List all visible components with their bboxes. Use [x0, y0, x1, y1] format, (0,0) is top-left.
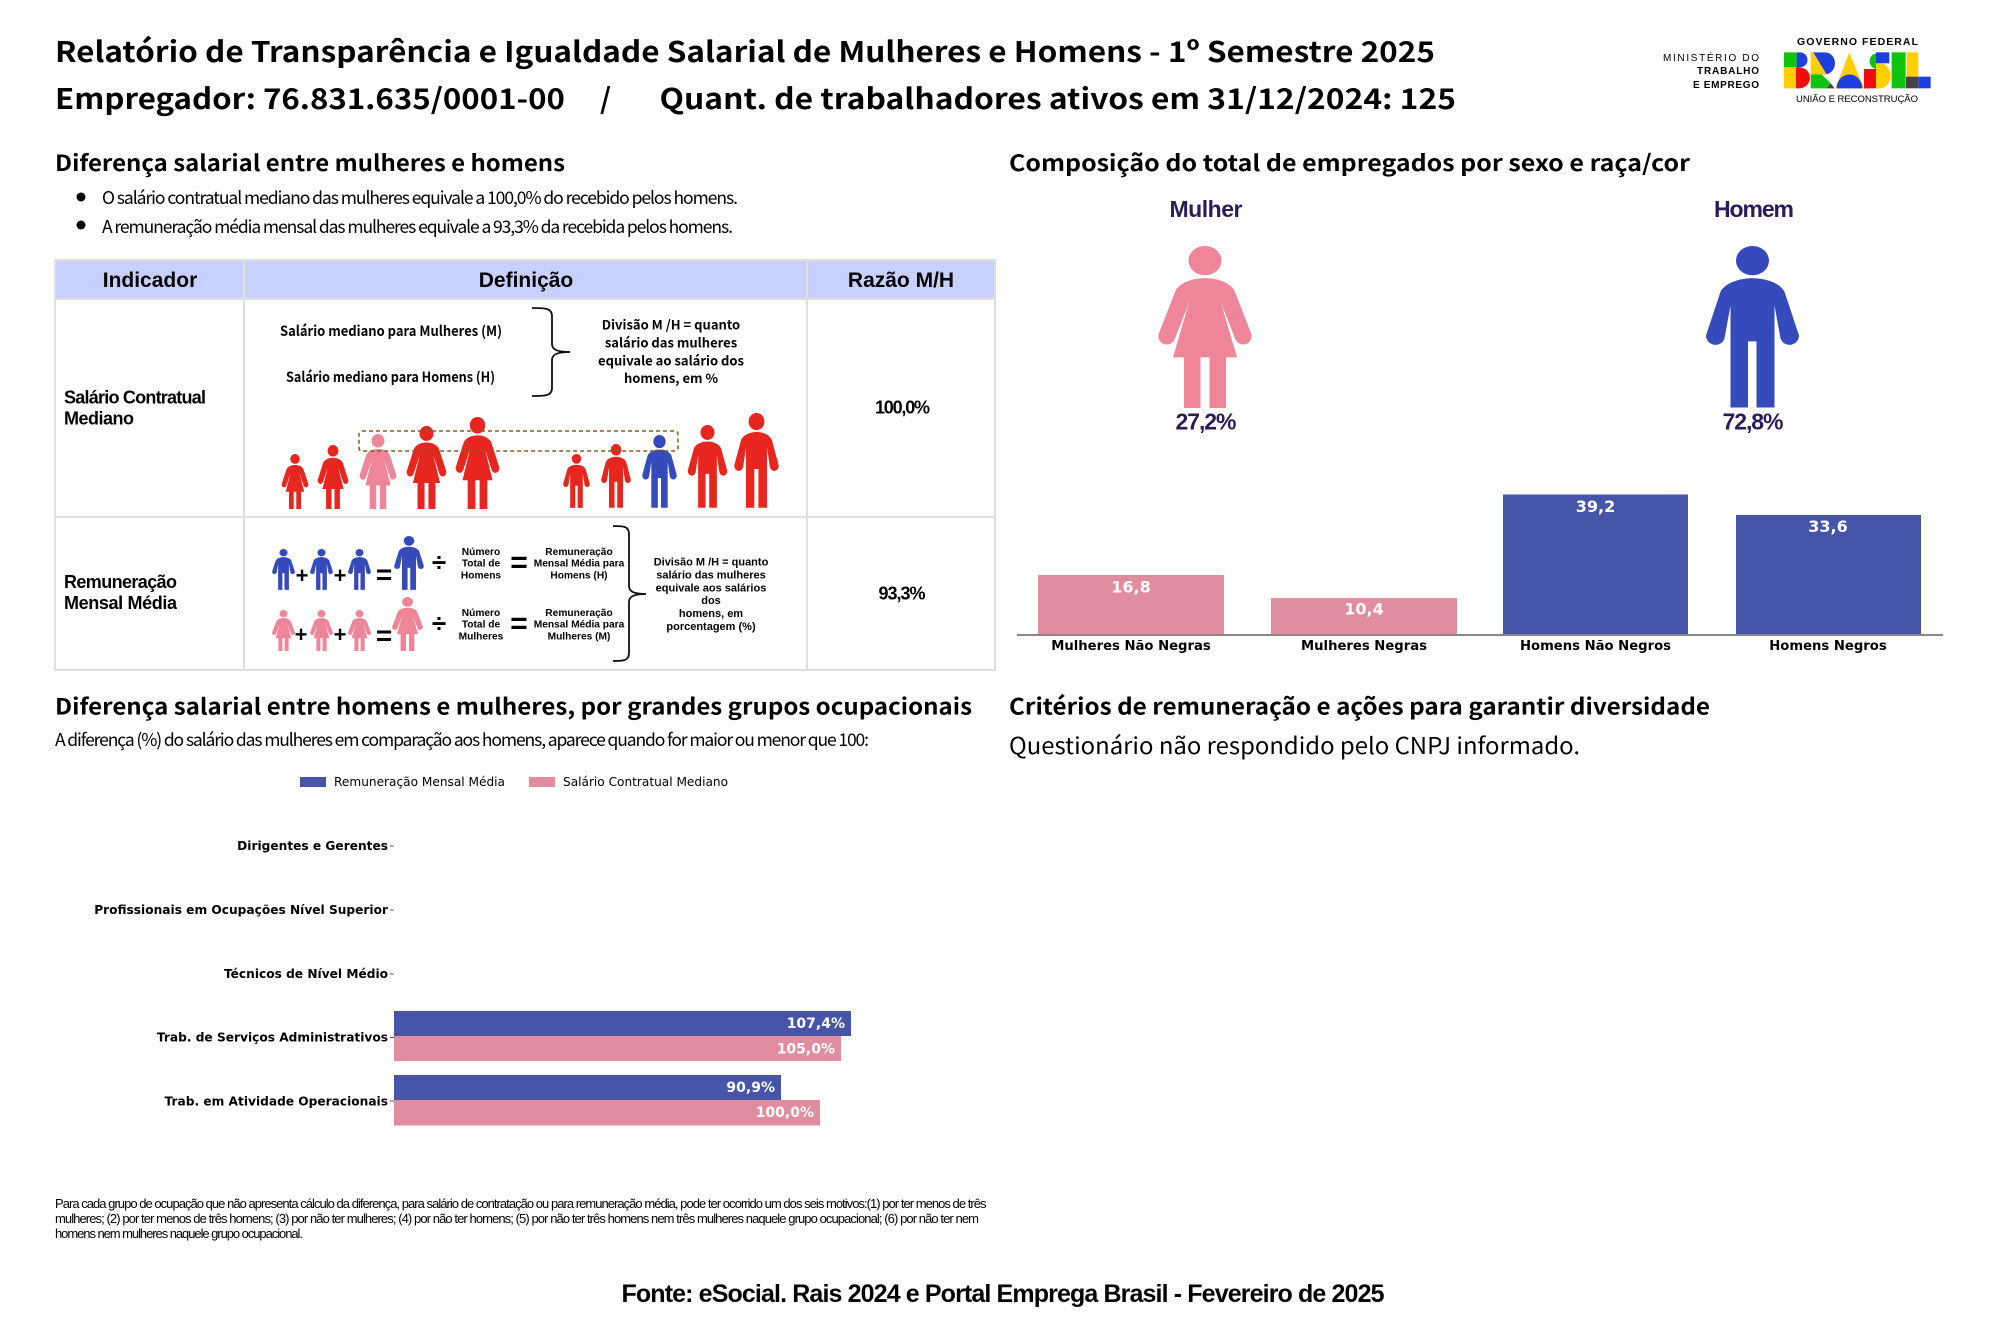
row: salário contratual mediano: Salário mediano para Mulheres (M): [280, 321, 502, 341]
footnote: homens nem mulheres naquele grupo ocupacional.: [55, 1226, 303, 1241]
row: salário contratual mediano: [64, 308, 930, 509]
bar chart: grupos ocupacionais: Trab. de Serviços Administrativos: [157, 1030, 388, 1044]
legend: Salário Contratual Mediano: [563, 774, 728, 789]
row: salário contratual mediano: Divisão M /H = quanto: [602, 314, 740, 334]
bar chart: grupos ocupacionais: [94, 839, 851, 1126]
bar chart: grupos ocupacionais: Profissionais em Ocupações Nível Superior: [94, 903, 388, 917]
row: remuneração mensal média: =: [376, 559, 392, 590]
icon: homem: [1706, 246, 1799, 408]
bar chart: grupos ocupacionais: Dirigentes e Gerentes: [237, 839, 388, 853]
title: Quant. de trabalhadores ativos em 31/12/2024: 125: [660, 77, 1456, 118]
heading: composição: Composição do total de empregados por sexo e raça/cor: [1009, 146, 1690, 178]
row: remuneração mensal média: +: [295, 622, 307, 647]
title: [55, 30, 1456, 118]
panel: homem: [1706, 196, 1799, 434]
icons: mediana: [282, 413, 779, 509]
title: Empregador: 76.831.635/0001-00: [55, 77, 565, 118]
row: remuneração mensal média: Número: [462, 547, 500, 558]
bar chart: composição por raça/cor: Homens Não Negros: [1520, 639, 1671, 654]
text block: bullets: O salário contratual mediano das mulheres equivale a 100,0% do recebido pelos homens.: [102, 185, 738, 210]
logo: governo federal: E EMPREGO: [1693, 80, 1759, 91]
icons: mulheres: [272, 597, 423, 651]
row: remuneração mensal média: Divisão M /H = quanto: [654, 556, 769, 568]
heading: diferença por grupos ocupacionais: Diferença salarial entre homens e mulheres, por grandes grupos ocupacionais: [55, 690, 972, 722]
table header: [103, 269, 954, 292]
row: remuneração mensal média: Homens: [461, 570, 501, 582]
bar chart: grupos ocupacionais: 90,9%: [726, 1080, 775, 1096]
text block: bullets: A remuneração média mensal das mulheres equivale a 93,3% da recebida pelos homens.: [102, 214, 733, 239]
row: remuneração mensal média: ÷: [432, 608, 446, 638]
source: Fonte: eSocial. Rais 2024 e Portal Emprega Brasil - Fevereiro de 2025: [622, 1280, 1385, 1308]
row: remuneração mensal média: +: [296, 563, 308, 588]
row: salário contratual mediano: homens, em %: [624, 368, 718, 387]
row: remuneração mensal média: Total de: [462, 558, 500, 570]
legend: Remuneração Mensal Média: [334, 774, 505, 789]
row: remuneração mensal média: dos: [701, 595, 721, 607]
logo: governo federal: GOVERNO FEDERAL: [1797, 36, 1919, 48]
row: remuneração mensal média: =: [376, 620, 392, 651]
title: Relatório de Transparência e Igualdade Salarial de Mulheres e Homens - 1º Semestre 2025: [55, 30, 1435, 71]
row: remuneração mensal média: porcentagem (%): [666, 621, 756, 633]
row: remuneração mensal média: +: [334, 563, 346, 588]
text block: subtítulo: A diferença (%) do salário das mulheres em comparação aos homens, aparece quando for maior ou menor que 100:: [55, 727, 869, 752]
logo: governo federal: TRABALHO: [1697, 66, 1759, 77]
panel: mulher: [1158, 196, 1252, 434]
table header: Definição: [479, 269, 573, 292]
table: indicadores: [55, 260, 995, 670]
row: remuneração mensal média: Mulheres: [459, 632, 504, 642]
row: remuneração mensal média: Número: [462, 608, 500, 619]
bar chart: grupos ocupacionais: 107,4%: [787, 1016, 845, 1032]
row: remuneração mensal média: 93,3%: [878, 584, 926, 604]
panel: homem: Homem: [1714, 196, 1794, 222]
row: salário contratual mediano: 100,0%: [875, 398, 930, 418]
title: /: [600, 77, 611, 118]
bar chart: composição por raça/cor: 33,6: [1808, 517, 1848, 536]
bar chart: grupos ocupacionais: 100,0%: [756, 1105, 814, 1121]
heading: diferença salarial: Diferença salarial entre mulheres e homens: [55, 146, 565, 178]
table header: Razão M/H: [848, 269, 954, 292]
row: salário contratual mediano: salário das mulheres: [605, 332, 737, 352]
row: salário contratual mediano: Mediano: [64, 408, 134, 428]
row: salário contratual mediano: Salário Contratual: [64, 388, 206, 408]
row: remuneração mensal média: Homens (H): [550, 570, 608, 582]
table header: Indicador: [103, 269, 197, 292]
bar chart: grupos ocupacionais: 105,0%: [777, 1042, 835, 1058]
row: salário contratual mediano: equivale ao salário dos: [598, 350, 744, 370]
row: remuneração mensal média: +: [334, 622, 346, 647]
bar chart: composição por raça/cor: 16,8: [1111, 578, 1151, 596]
row: remuneração mensal média: Mulheres (M): [548, 632, 610, 642]
row: remuneração mensal média: Mensal Média para: [534, 620, 625, 630]
row: remuneração mensal média: Mensal Média: [64, 593, 178, 613]
row: remuneração mensal média: homens, em: [679, 608, 743, 620]
row: remuneração mensal média: Mensal Média para: [534, 558, 625, 570]
text block: bullets: [76, 185, 738, 239]
panel: homem: 72,8%: [1722, 408, 1784, 434]
icons: homens: [272, 536, 424, 590]
row: remuneração mensal média: =: [510, 546, 528, 579]
bar chart: grupos ocupacionais: Trab. em Atividade Operacionais: [165, 1094, 388, 1108]
bar chart: composição por raça/cor: Homens Negros: [1769, 639, 1887, 654]
row: remuneração mensal média: [64, 526, 926, 661]
bar chart: composição por raça/cor: 39,2: [1576, 497, 1615, 516]
bar chart: composição por raça/cor: [1017, 494, 1943, 654]
row: remuneração mensal média: =: [510, 607, 528, 640]
bar chart: grupos ocupacionais: Técnicos de Nível Médio: [224, 967, 388, 981]
row: remuneração mensal média: Total de: [462, 620, 500, 630]
row: remuneração mensal média: salário das mulheres: [656, 570, 766, 582]
panel: mulher: 27,2%: [1176, 408, 1236, 434]
row: remuneração mensal média: ÷: [432, 547, 446, 577]
bar chart: composição por raça/cor: 10,4: [1344, 600, 1384, 618]
legend: [300, 774, 728, 789]
logo: governo federal: MINISTÉRIO DO: [1663, 51, 1759, 64]
icon: mulher: [1158, 246, 1252, 408]
logo: governo federal: UNIÃO E RECONSTRUÇÃO: [1796, 94, 1918, 105]
bar chart: composição por raça/cor: Mulheres Negras: [1301, 639, 1427, 654]
heading: critérios: Critérios de remuneração e ações para garantir diversidade: [1009, 690, 1710, 722]
row: remuneração mensal média: Remuneração: [64, 572, 177, 592]
logo: governo federal: [1663, 36, 1931, 105]
row: remuneração mensal média: Remuneração: [545, 608, 613, 619]
panel: mulher: Mulher: [1170, 196, 1243, 222]
text block: questionário: Questionário não respondido pelo CNPJ informado.: [1009, 727, 1580, 761]
row: salário contratual mediano: Salário mediano para Homens (H): [286, 367, 495, 387]
footnote: Para cada grupo de ocupação que não apresenta cálculo da diferença, para salário de contratação ou para remuneração média, pode ter ocorrido um dos seis motivos:(1) por ter menos de três: [55, 1196, 987, 1211]
footnote: [55, 1196, 987, 1241]
row: remuneração mensal média: equivale aos salários: [656, 582, 766, 594]
footnote: mulheres; (2) por ter menos de três homens; (3) por não ter mulheres; (4) por não ter homens; (5) por não ter três homens nem três mulheres naquele grupo ocupacional; (6) por não ter nem: [55, 1211, 979, 1226]
row: remuneração mensal média: Remuneração: [545, 547, 613, 558]
bar chart: composição por raça/cor: Mulheres Não Negras: [1051, 639, 1211, 654]
